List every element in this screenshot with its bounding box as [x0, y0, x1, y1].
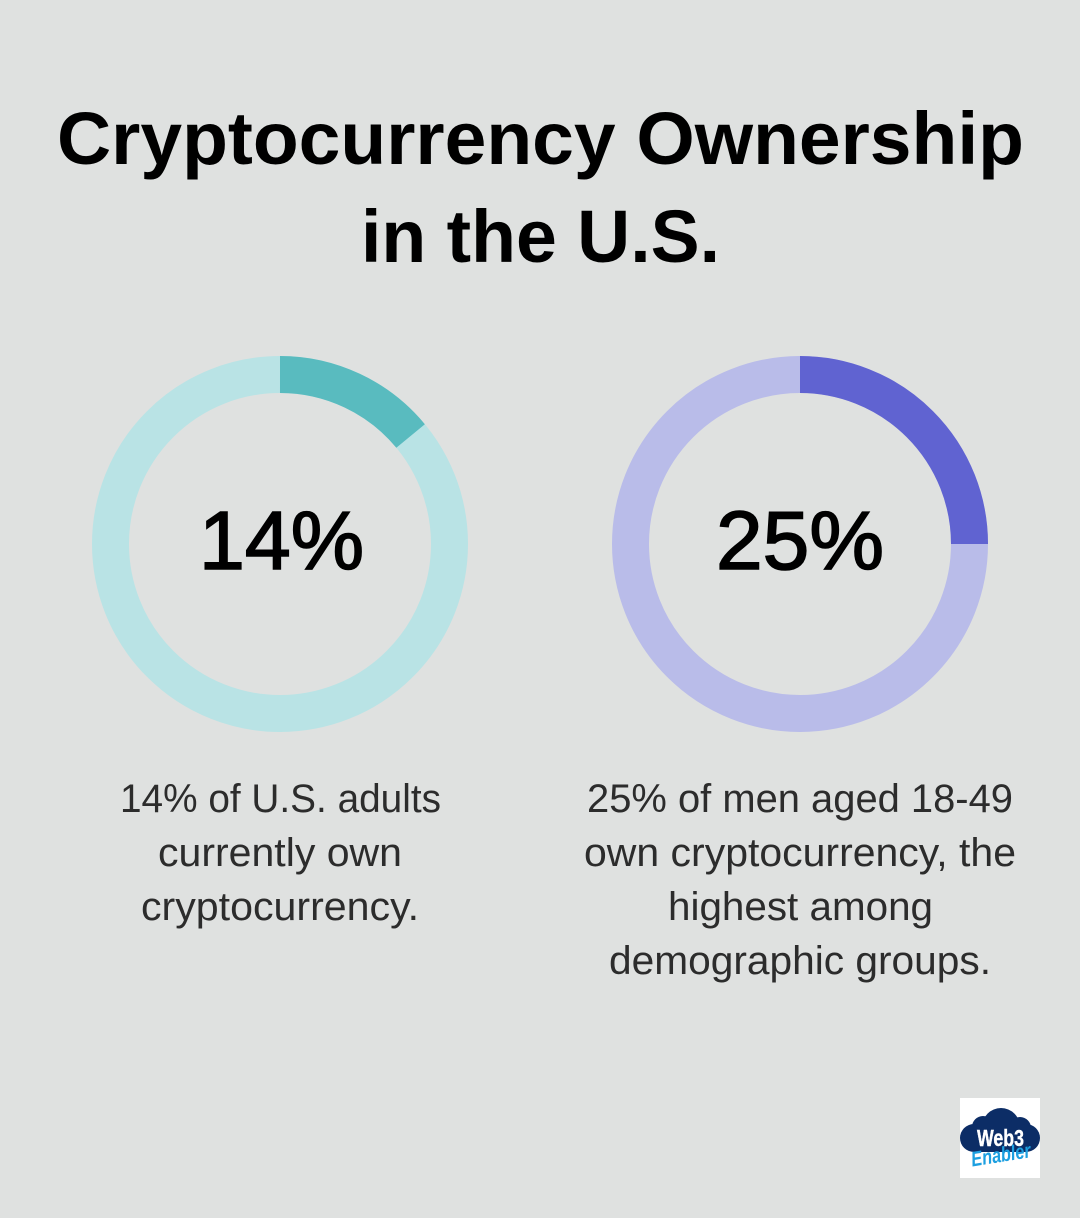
icon: cloud [960, 1108, 1040, 1152]
caption: 25% [584, 777, 1016, 983]
caption: 14%: 14% of U.S. adults [120, 777, 441, 821]
title [57, 97, 1024, 278]
logo: Web3 Enabler: Enabler [969, 1139, 1034, 1171]
panel: 14% stat [110, 374, 450, 929]
caption: 14%: cryptocurrency. [141, 885, 419, 929]
logo text: Web3 [977, 1125, 1024, 1151]
caption: 25%: demographic groups. [609, 939, 991, 983]
panel: 25% stat [584, 374, 1016, 983]
caption: 25%: own cryptocurrency, the [584, 831, 1016, 875]
donut chart: 25% [630, 374, 970, 714]
logo: Web3 Enabler [960, 1098, 1040, 1178]
caption: 14%: currently own [158, 831, 402, 875]
value: 14%: 14% [199, 494, 364, 587]
value: 25%: 25% [716, 494, 884, 587]
title: in the U.S. [361, 195, 720, 278]
donut chart: 14% [110, 374, 450, 714]
caption: 14% [120, 777, 441, 929]
caption: 25%: highest among [668, 885, 933, 929]
caption: 25%: 25% of men aged 18-49 [587, 777, 1013, 821]
title: Cryptocurrency Ownership [57, 97, 1024, 180]
